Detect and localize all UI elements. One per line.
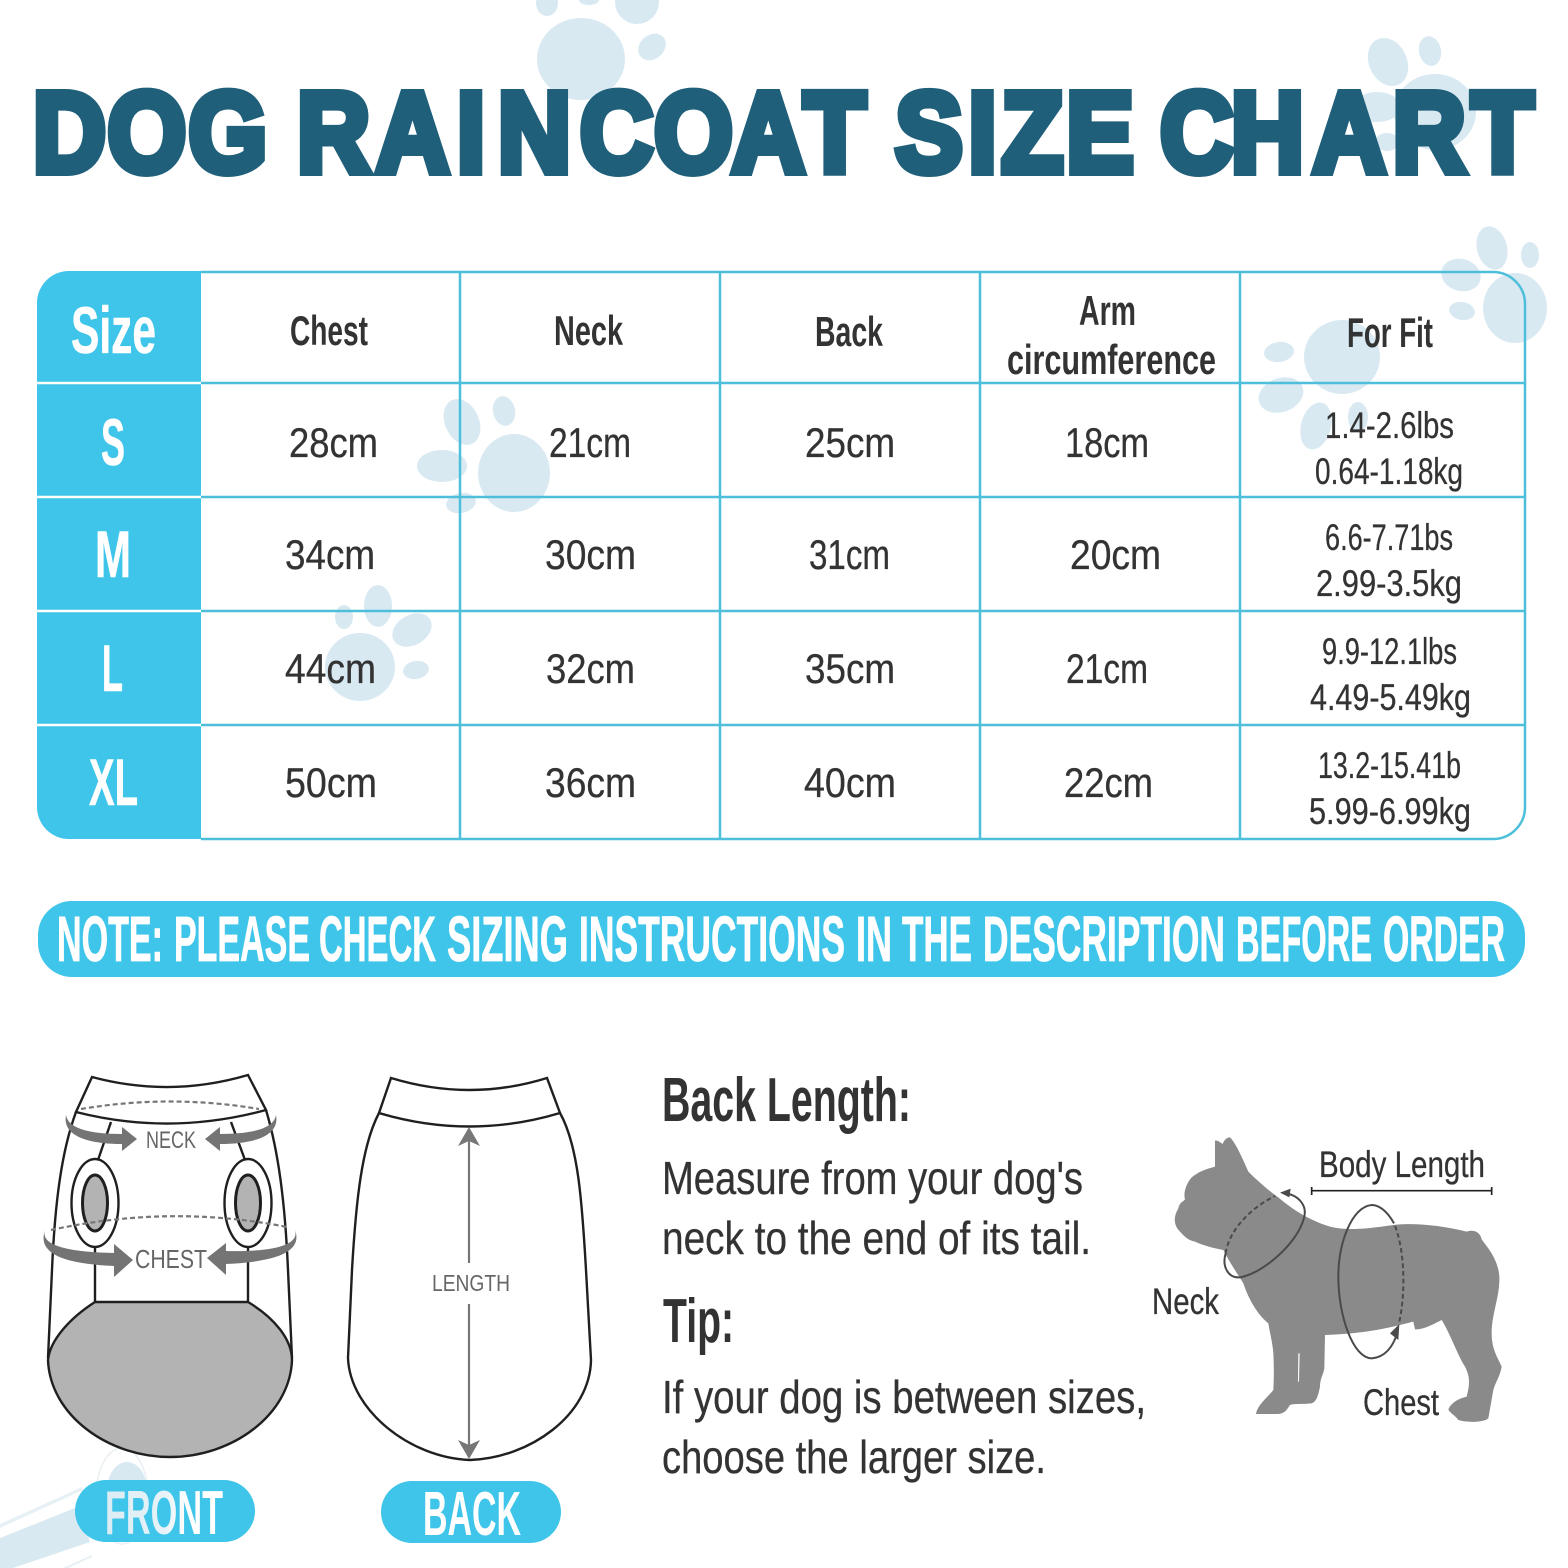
row S: 1.4-2.6lbs: [1325, 405, 1454, 446]
row M: 31cm: [809, 531, 890, 578]
length label: LENGTH: [432, 1270, 510, 1296]
row S: 28cm: [289, 419, 378, 466]
header row: Back: [815, 308, 883, 355]
size labels: XL: [89, 745, 138, 819]
neck label: Neck: [1152, 1281, 1219, 1322]
row M: 20cm: [1070, 531, 1161, 578]
chest arrows: [44, 1230, 296, 1277]
row L: 4.49-5.49kg: [1310, 677, 1471, 718]
note banner: [38, 901, 1525, 977]
back length instructions: neck to the end of its tail.: [662, 1212, 1091, 1264]
size table: [37, 271, 1525, 839]
size labels: M: [95, 517, 131, 591]
row S: 18cm: [1065, 419, 1149, 466]
body length bar: [1312, 1187, 1492, 1195]
header row: circumference: [1007, 336, 1216, 383]
body length label: Body Length: [1319, 1144, 1485, 1185]
note banner: CHECK: [319, 903, 436, 975]
row L: 32cm: [546, 645, 635, 692]
back pill label: BACK: [423, 1480, 521, 1549]
size labels: L: [102, 631, 123, 705]
front belly panel: [48, 1302, 292, 1457]
arm holes: [72, 1159, 272, 1247]
row L: 44cm: [285, 645, 376, 692]
row S: 0.64-1.18kg: [1315, 451, 1463, 492]
size labels: [71, 293, 156, 819]
row M: 34cm: [285, 531, 375, 578]
front pill label: FRONT: [105, 1479, 223, 1548]
back length instructions: Measure from your dog's: [662, 1152, 1083, 1204]
header row: [290, 287, 1433, 383]
note banner: THE: [902, 903, 972, 975]
back length instructions: [662, 1066, 1091, 1264]
row L: 21cm: [1066, 645, 1148, 692]
front garment outline: [48, 1075, 292, 1358]
front raincoat diagram: [44, 1075, 296, 1457]
back garment outline: [348, 1078, 591, 1460]
note banner: NOTE:: [57, 903, 163, 975]
length arrow: [468, 1135, 470, 1452]
front pill label: [75, 1479, 255, 1548]
row XL: 22cm: [1064, 759, 1153, 806]
note banner: INSTRUCTIONS: [579, 903, 845, 975]
neck measure ring: [1225, 1193, 1305, 1277]
row L: [285, 631, 1471, 718]
chest measure ring: [1338, 1205, 1403, 1358]
size labels: Size: [71, 293, 156, 367]
row XL: 50cm: [285, 759, 377, 806]
chest label: CHEST: [135, 1244, 207, 1274]
row XL: 36cm: [545, 759, 636, 806]
note banner: DESCRIPTION: [983, 903, 1225, 975]
header row: Chest: [290, 307, 368, 354]
dog measurement diagram: [1152, 1137, 1502, 1423]
row XL: 13.2-15.41b: [1318, 745, 1461, 786]
row M: 30cm: [545, 531, 636, 578]
note banner: BEFORE: [1236, 903, 1372, 975]
back raincoat diagram: [348, 1078, 591, 1460]
chest label: Chest: [1363, 1382, 1440, 1423]
neck arrows: [66, 1115, 276, 1151]
header row: Arm: [1079, 287, 1136, 334]
row L: 35cm: [805, 645, 895, 692]
note banner: PLEASE: [174, 903, 310, 975]
tip: [662, 1287, 1146, 1483]
dashed measure lines: [51, 1102, 287, 1230]
row L: 9.9-12.1lbs: [1322, 631, 1457, 672]
row M: 2.99-3.5kg: [1316, 563, 1462, 604]
back pill label: [381, 1480, 561, 1549]
neck label: NECK: [146, 1127, 196, 1154]
row XL: [285, 745, 1471, 832]
header row: For Fit: [1347, 309, 1433, 356]
row S: 25cm: [805, 419, 895, 466]
row XL: 40cm: [804, 759, 896, 806]
size column background: [37, 271, 201, 839]
back length instructions: Back Length:: [662, 1066, 911, 1135]
row S: [289, 405, 1463, 492]
row S: 21cm: [549, 419, 631, 466]
row XL: 5.99-6.99kg: [1309, 791, 1471, 832]
row M: [285, 517, 1462, 604]
length arrowheads: [458, 1127, 480, 1459]
tip: Tip:: [663, 1287, 734, 1356]
note banner: SIZING: [447, 903, 568, 975]
dog silhouette: [1175, 1137, 1502, 1422]
size column row dividers: [37, 383, 201, 725]
table grid lines: [201, 272, 1525, 839]
tip: choose the larger size.: [662, 1431, 1046, 1483]
title: DOG RAINCOAT SIZE CHART: [33, 69, 1533, 196]
tip: If your dog is between sizes,: [662, 1371, 1146, 1423]
header row: Neck: [554, 307, 623, 354]
note banner: IN: [856, 903, 892, 975]
size labels: S: [101, 405, 125, 479]
row M: 6.6-7.71bs: [1325, 517, 1453, 558]
